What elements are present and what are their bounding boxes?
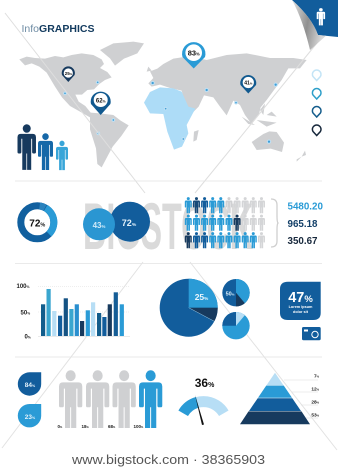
person percent labels: 18%	[82, 424, 90, 429]
map: eurasia	[148, 53, 307, 124]
person percent labels	[58, 424, 144, 429]
pyramid labels: 28%	[311, 400, 320, 406]
drop badge 23%	[18, 404, 41, 427]
pin: 25%	[62, 66, 75, 82]
values list	[288, 202, 323, 247]
small pie chart 50%: 50%	[226, 292, 235, 298]
pyramid labels: 53%	[311, 412, 320, 418]
callout box 47%: Lorem Ipsum	[289, 305, 313, 309]
axis labels: 0%	[24, 334, 31, 340]
callout box 47%: dolor sit	[293, 310, 309, 314]
donut chart 72%: 72%	[29, 218, 45, 230]
axis labels	[16, 284, 31, 340]
row 1	[185, 197, 265, 213]
row 2	[185, 215, 265, 231]
drop badge 84%	[18, 372, 41, 396]
pictogram rows	[185, 197, 265, 248]
pin: 62%	[91, 92, 111, 115]
row 3	[185, 232, 265, 248]
person fill chart	[58, 370, 162, 429]
pin: 83%	[182, 42, 205, 68]
values list: 5480.20	[288, 202, 323, 212]
axis labels: 50%	[20, 310, 30, 316]
values list: 350.67	[288, 236, 318, 247]
legend pins	[312, 70, 321, 136]
bar chart	[16, 284, 130, 340]
pin: 25%: 25%	[65, 71, 73, 76]
icon: camera	[302, 327, 321, 340]
drop badge 84%: 84%	[25, 382, 36, 389]
pin: 83%: 83%	[188, 48, 200, 58]
small pie chart segments	[222, 312, 250, 339]
pin: 41%	[240, 75, 256, 94]
large pie chart 25%: 25%	[195, 292, 209, 302]
three person figures	[18, 124, 68, 170]
watermark: upper diagonal lines	[5, 13, 317, 193]
map: greenland	[100, 42, 144, 66]
person percent labels: 68%	[108, 424, 116, 429]
page curl corner with person icon	[292, 0, 338, 50]
pyramid labels: 12%	[311, 386, 320, 392]
title: InfoGRAPHICS	[22, 23, 94, 35]
watermark: lower diagonal lines	[2, 262, 337, 450]
drop badge 23%: 23%	[25, 414, 36, 421]
pyramid chart	[240, 373, 320, 424]
map: africa	[144, 87, 195, 150]
person percent labels: 100%	[134, 424, 144, 429]
brace	[271, 199, 278, 247]
person percent labels: 0%	[58, 424, 63, 429]
pin: 41%: 41%	[244, 80, 253, 86]
venn circles 43% and 72%	[83, 202, 150, 242]
pin: 62%: 62%	[96, 98, 106, 104]
gauge 36%	[183, 376, 224, 425]
callout box 47%: 47%	[288, 290, 313, 306]
map: north and south america	[19, 53, 129, 167]
small pie chart 50%	[222, 279, 250, 306]
pyramid labels: 7%	[314, 374, 320, 380]
map: location dots	[64, 81, 277, 143]
donut chart 72%	[21, 206, 54, 239]
venn circles 43% and 72%: 43%	[93, 221, 106, 230]
pyramid labels	[311, 374, 320, 418]
world map	[19, 42, 307, 167]
map: australia and islands	[97, 67, 306, 162]
large pie chart 25%	[160, 279, 218, 337]
values list: 965.18	[288, 219, 318, 230]
axis labels: 100%	[16, 284, 30, 290]
callout box 47%	[280, 282, 321, 320]
watermark url: www.bigstock.com · 38365903	[71, 453, 265, 467]
gauge 36%: 36%	[195, 376, 215, 390]
venn circles 43% and 72%: 72%	[122, 218, 137, 228]
